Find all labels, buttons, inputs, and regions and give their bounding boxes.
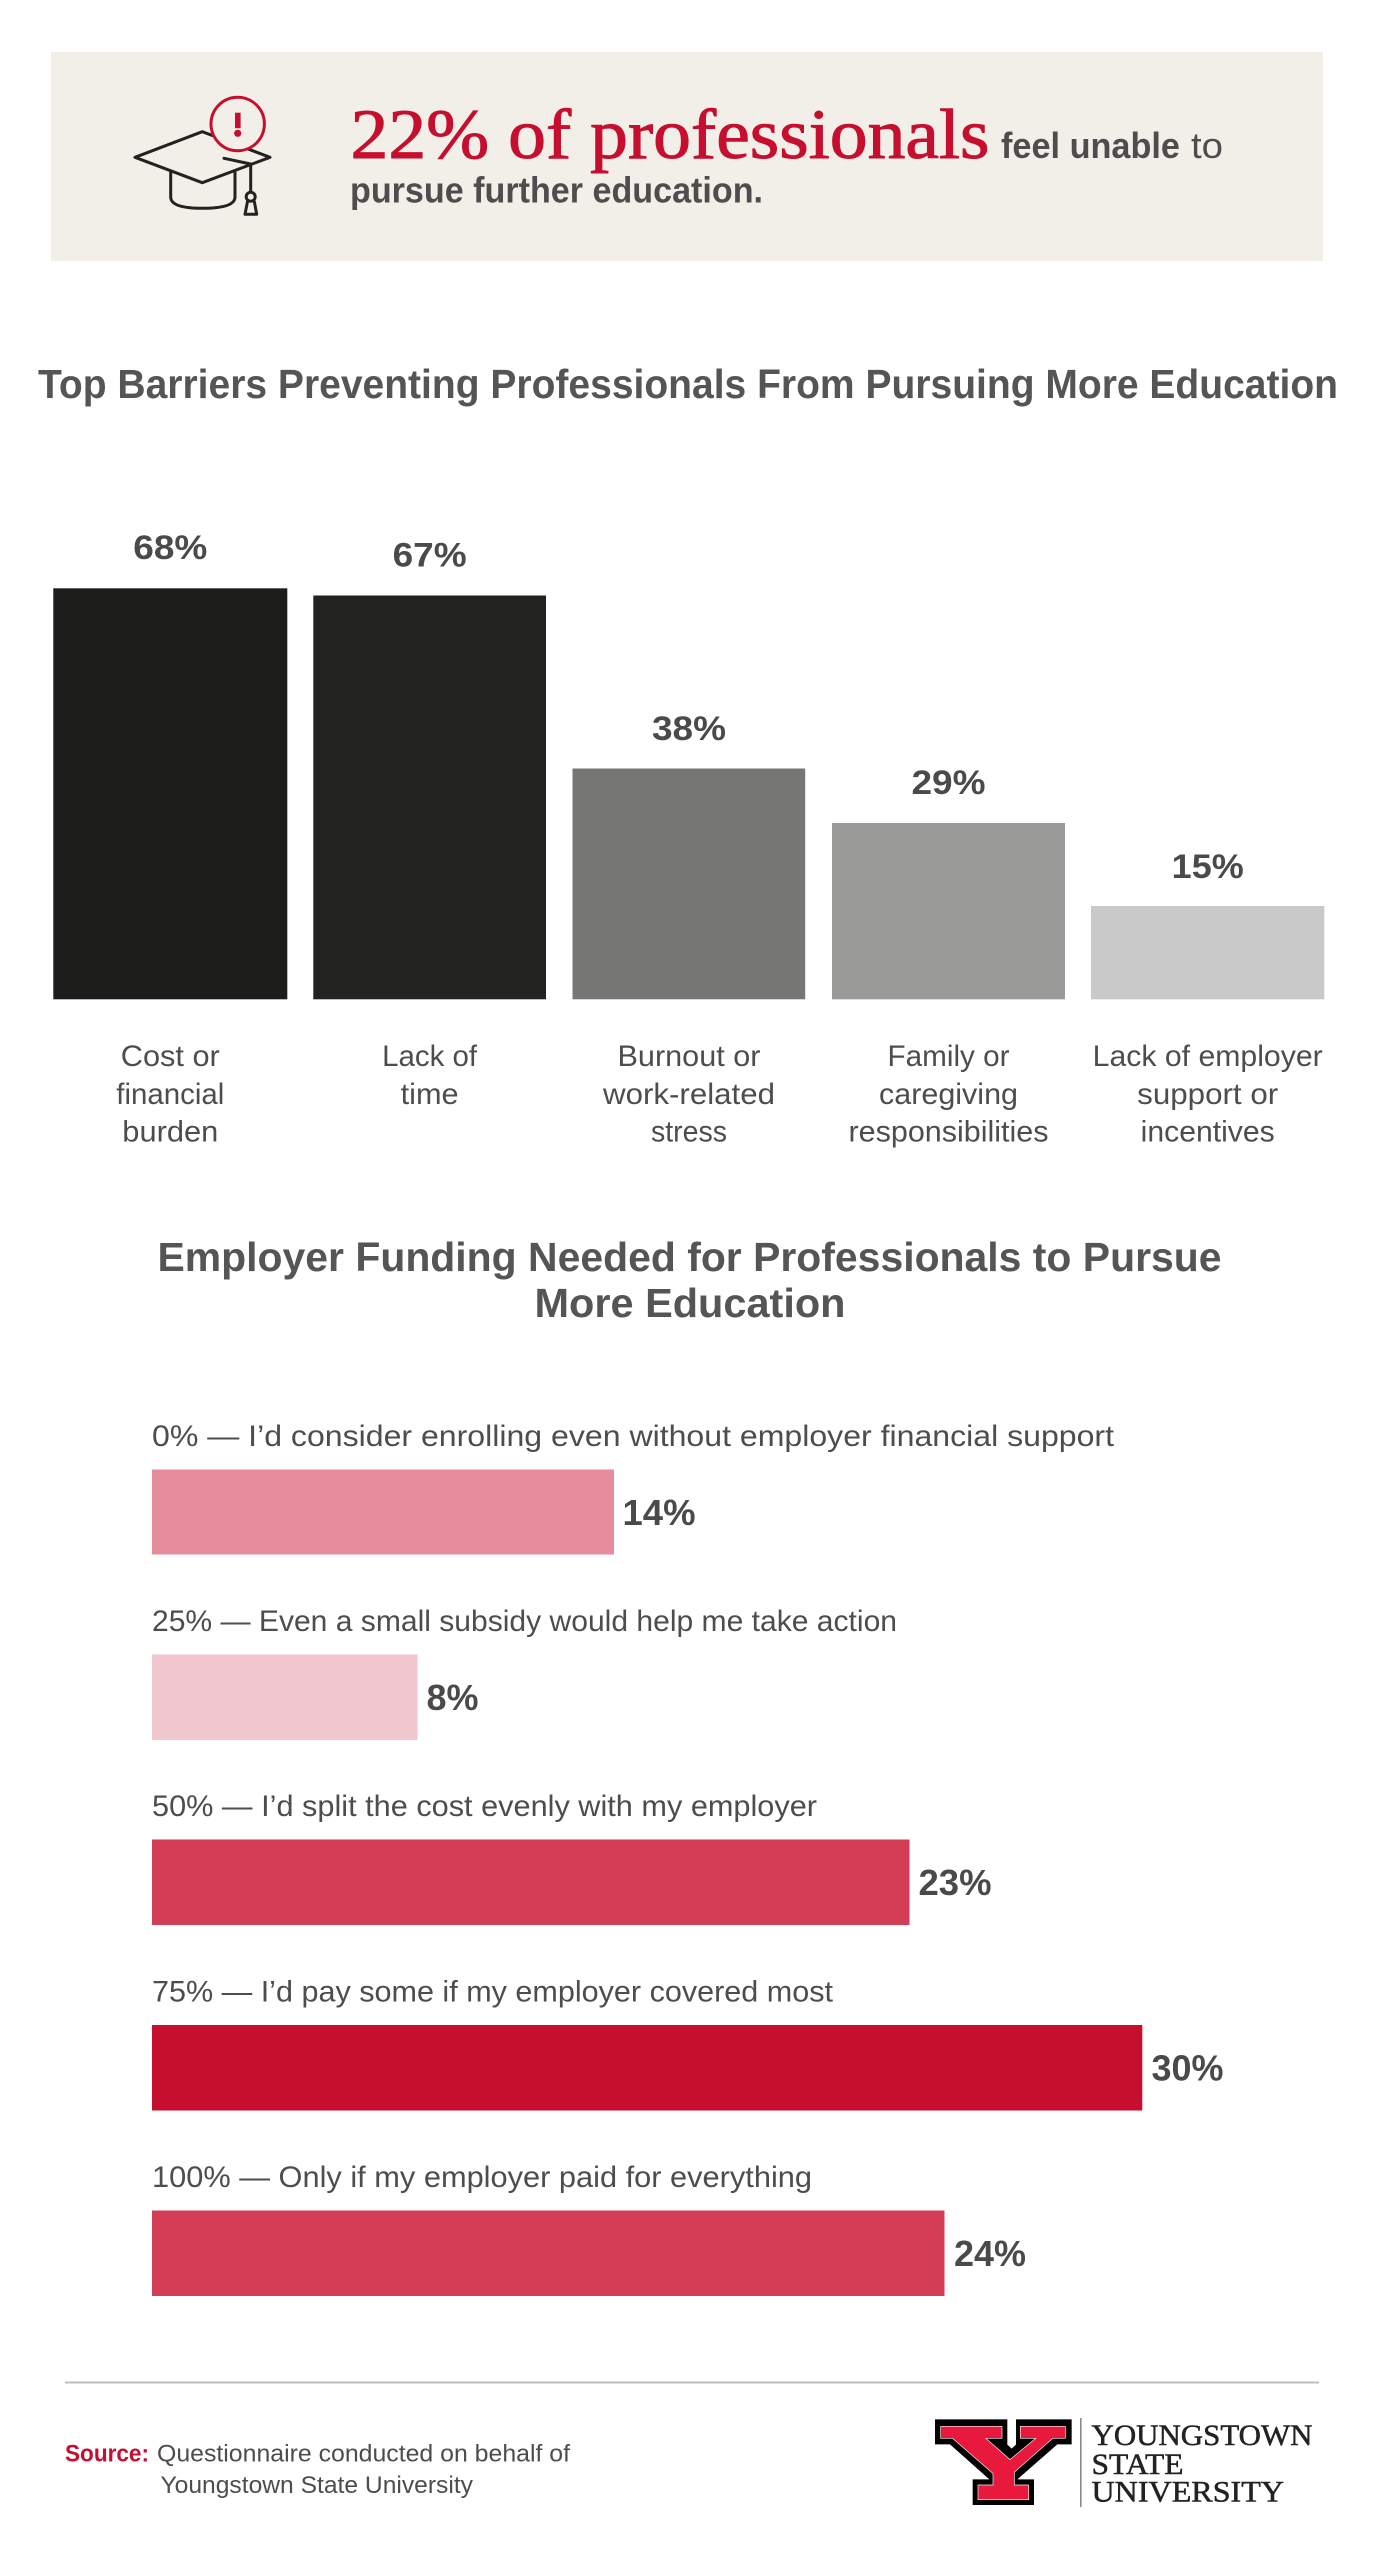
bar: lack of time 67%: [313, 536, 546, 1111]
bar: family or caregiving 29%: caregiving: [879, 1078, 1018, 1111]
row: 0% funding 14%: [152, 1420, 1115, 1554]
row: 25% funding 8%: 8%: [426, 1677, 478, 1718]
bar: lack of employer support 15%: Lack of employer: [1093, 1040, 1323, 1073]
heading: employer funding: Employer Funding Needed for Professionals to Pursue: [158, 1234, 1222, 1280]
headline text: feel unable: [1001, 125, 1180, 166]
icon: block Y: [935, 2419, 1072, 2505]
bar: family or caregiving 29%: [832, 764, 1065, 1148]
heading: top barriers: Top Barriers Preventing Professionals From Pursuing More Education: [38, 361, 1338, 407]
heading: employer funding: [158, 1234, 1222, 1326]
source note: Questionnaire conducted on behalf of: [157, 2440, 570, 2468]
row: 75% funding 30%: 30%: [1152, 2048, 1224, 2088]
logo wordmark: UNIVERSITY: [1092, 2476, 1284, 2508]
panel: headline banner: [51, 52, 1323, 261]
row: 100% funding 24%: 24%: [954, 2233, 1026, 2274]
row: 75% funding 30%: 75% — I’d pay some if my employer covered most: [152, 1976, 834, 2008]
bar: cost or financial burden 68%: financial: [116, 1078, 224, 1111]
bar: cost or financial burden 68%: Cost or: [121, 1040, 220, 1073]
bar: family or caregiving 29%: 29%: [912, 764, 986, 802]
bar: cost or financial burden 68%: 68%: [133, 529, 207, 567]
bar: lack of time 67%: Lack of: [382, 1040, 478, 1073]
row: 75% funding 30%: [152, 1976, 1224, 2110]
row: 100% funding 24%: [152, 2161, 1026, 2296]
bar: family or caregiving 29%: responsibilities: [848, 1116, 1048, 1148]
source note: Source:: [65, 2440, 149, 2468]
bar: lack of employer support 15%: support or: [1137, 1078, 1278, 1111]
source note: [65, 2440, 570, 2499]
row: 0% funding 14%: 0% — I’d consider enrolling even without employer financial support: [152, 1420, 1115, 1453]
bar: family or caregiving 29%: Family or: [888, 1040, 1010, 1073]
row: 0% funding 14%: 14%: [622, 1492, 696, 1533]
headline text: pursue further education.: [350, 170, 763, 210]
logo: Youngstown State University: [935, 2418, 1312, 2508]
bar: lack of time 67%: time: [401, 1078, 459, 1111]
headline text: [350, 96, 1223, 210]
bar: cost or financial burden 68%: [53, 529, 287, 1148]
bar chart: employer funding: [152, 1420, 1224, 2296]
bar: lack of employer support 15%: [1091, 848, 1324, 1148]
logo wordmark: [1092, 2419, 1312, 2508]
source note: Youngstown State University: [160, 2472, 473, 2499]
headline text: 22% of professionals: [350, 96, 990, 174]
bar: burnout 38%: 38%: [652, 710, 726, 748]
icon: graduation cap with alert: [135, 97, 270, 214]
bar: burnout 38%: Burnout or: [618, 1040, 760, 1073]
bar: burnout 38%: stress: [651, 1116, 727, 1148]
headline text: to: [1191, 125, 1223, 166]
bar: burnout 38%: [572, 710, 805, 1148]
bar: lack of employer support 15%: incentives: [1141, 1116, 1275, 1148]
bar chart: top barriers: [53, 529, 1324, 1148]
row: 25% funding 8%: [152, 1605, 897, 1740]
logo wordmark: YOUNGSTOWN: [1092, 2419, 1312, 2452]
bar: lack of time 67%: 67%: [393, 536, 467, 574]
row: 50% funding 23%: 50% — I’d split the cost evenly with my employer: [152, 1790, 817, 1823]
logo wordmark: STATE: [1092, 2448, 1184, 2481]
row: 50% funding 23%: [152, 1790, 992, 1925]
row: 50% funding 23%: 23%: [918, 1862, 992, 1903]
row: 100% funding 24%: 100% — Only if my employer paid for everything: [152, 2161, 812, 2194]
bar: lack of employer support 15%: 15%: [1172, 848, 1244, 886]
heading: employer funding: More Education: [534, 1280, 846, 1326]
bar: burnout 38%: work-related: [602, 1078, 775, 1111]
bar: cost or financial burden 68%: burden: [122, 1116, 218, 1148]
row: 25% funding 8%: 25% — Even a small subsidy would help me take action: [152, 1605, 897, 1638]
